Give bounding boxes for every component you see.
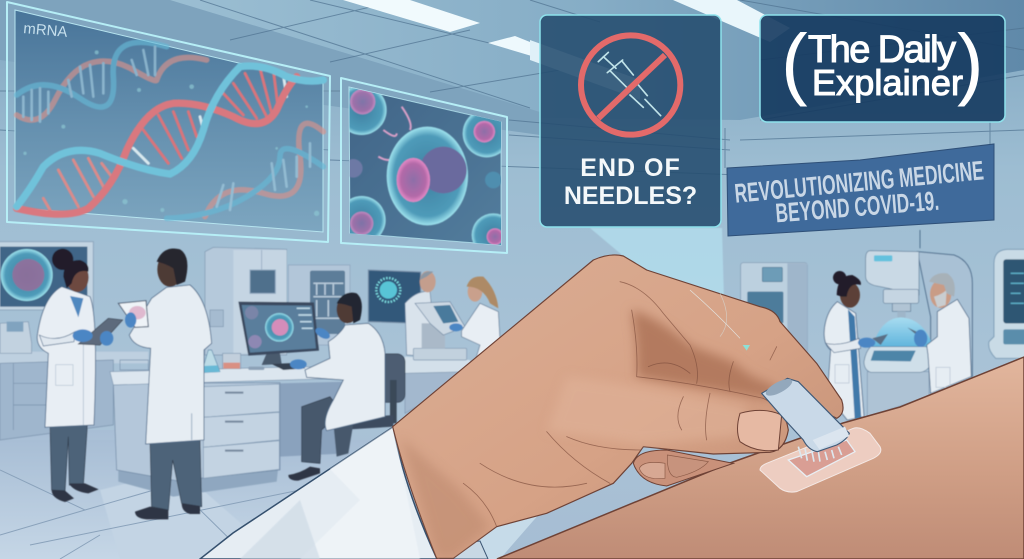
wall banner [727,144,994,236]
label: mRNA: mRNA [23,20,68,41]
fingers below the palm [633,450,733,486]
tall cabinet [205,247,287,355]
hand holding microneedle applicator [393,255,881,558]
imaging machine [864,251,972,417]
cells [349,88,501,245]
lab coat sleeve [200,427,488,559]
helix strands [17,42,323,218]
wall screen [0,242,93,310]
holographic panel: cell close-up [337,78,515,257]
icon: crossed out syringe [581,35,680,135]
wall banner: BEYOND COVID-19. [774,186,940,228]
lab desk and drawers [110,367,347,497]
glass fridge [288,265,350,345]
hand silhouette [393,255,843,558]
callout card: end of needles: NEEDLES? [564,182,697,210]
callout card: end of needles [540,15,721,227]
microneedle bristles [798,447,842,462]
ceiling light panels [343,0,790,100]
flask and test tubes [202,350,264,373]
applicator device [762,376,849,452]
equipment cabinet [741,263,807,363]
beam of light from callout [590,228,724,300]
scientist with grey hair [907,273,971,393]
back counter with drawers [0,322,148,440]
fingertip trace [690,290,740,338]
heading: end of needles: END OF [580,154,681,182]
hand shading [400,310,783,558]
logo card: the daily explainer: ( [781,18,808,107]
holographic panel: mRNA double helix [7,2,330,242]
logo card: the daily explainer: Explainer [812,62,963,103]
wall divider line [918,230,921,248]
scientist with clipboard [37,249,123,502]
knuckle and crease lines [463,282,787,527]
monitor with cell [238,302,319,370]
scientist with tablet [118,248,212,519]
wall monitor with virus [368,270,421,323]
patient's forearm [497,357,1024,559]
microneedle patch [760,428,881,492]
right back counter [403,357,470,413]
logo card: the daily explainer: The Daily [808,29,956,71]
logo card: the daily explainer [760,15,1005,122]
thumb nail [737,410,782,451]
microscope and two researchers [405,271,500,362]
background scene: right lab equipment and researchers [741,230,1024,420]
seated scientist [288,293,405,481]
background scene: left lab workers and bench [0,242,500,519]
logo card: the daily explainer: ) [957,18,984,107]
far right machine [989,249,1024,358]
scientist with dark hair [824,271,888,420]
